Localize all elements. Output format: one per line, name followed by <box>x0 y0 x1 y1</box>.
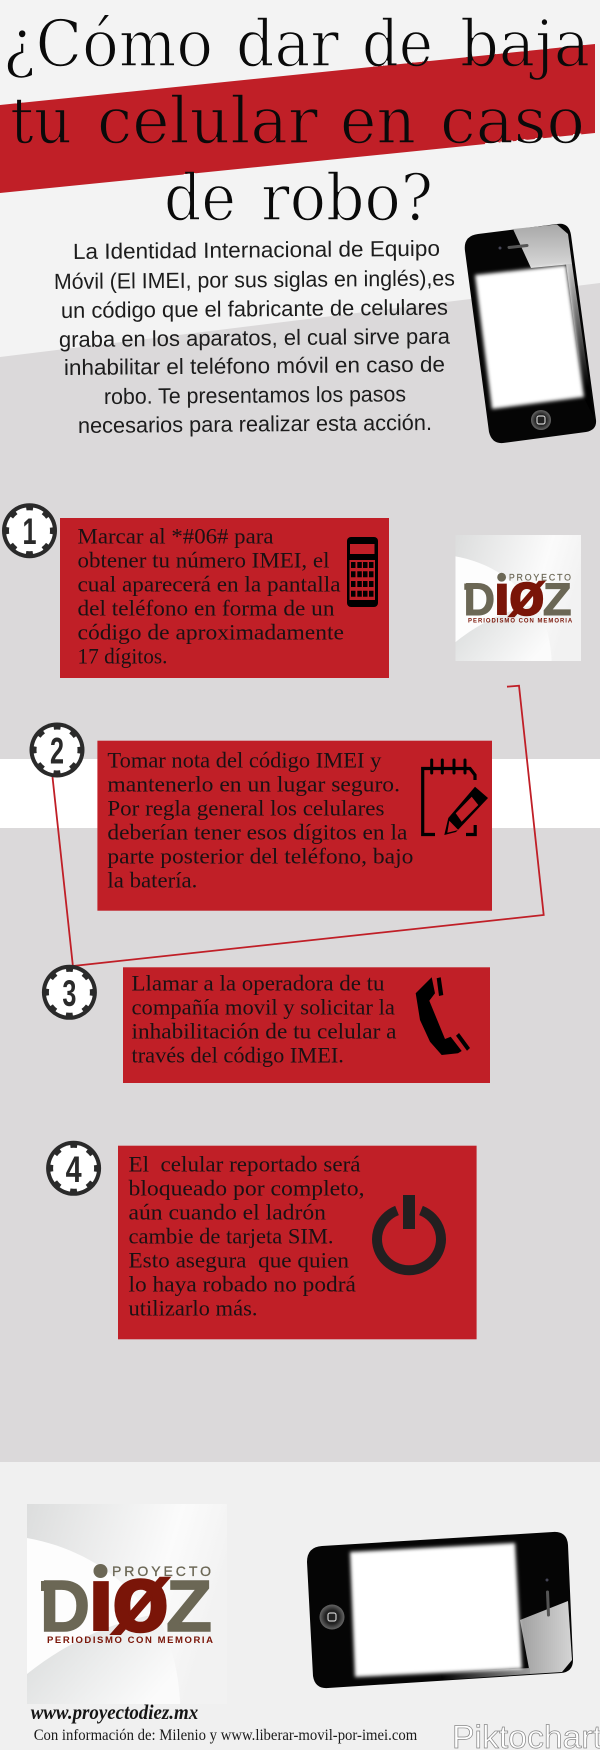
intro paragraph: inhabilitar el teléfono móvil en caso de <box>64 352 445 380</box>
step 3 text: inhabilitación de tu celular a <box>132 1019 397 1044</box>
step 1 box <box>60 518 389 678</box>
intro paragraph: robo. Te presentamos los pasos <box>104 381 406 409</box>
title <box>3 7 590 236</box>
red diagonal banner <box>0 44 595 193</box>
badge 3 <box>42 965 97 1020</box>
badge 4: 4 <box>66 1149 82 1190</box>
step 4 <box>46 1141 477 1339</box>
step 3 box <box>123 967 490 1083</box>
logo: Proyecto Diez large: Z <box>166 1567 212 1647</box>
logo: Proyecto Diez large: PERIODISMO CON MEMORIA <box>47 1635 213 1646</box>
step 1 text: 17 dígitos. <box>78 644 168 669</box>
step 3 text: Llamar a la operadora de tu <box>132 971 384 996</box>
background: footer <box>0 1462 600 1750</box>
background: grey slanted section <box>0 283 600 1462</box>
source credit: Con información de: Milenio y www.liberar-movil-por-imei.com <box>34 1727 417 1744</box>
title: en <box>340 84 416 159</box>
step 4 text: aún cuando el ladrón <box>128 1199 326 1224</box>
step 1 text: del teléfono en forma de un <box>78 596 334 621</box>
title: de <box>164 161 236 236</box>
logo: Proyecto Diez large: D <box>40 1567 90 1647</box>
background: white band <box>0 759 600 828</box>
step 2 text: la batería. <box>107 868 197 893</box>
logo: Proyecto Diez large: I <box>86 1567 116 1647</box>
step 2 text: mantenerlo en un lugar seguro. <box>107 772 400 797</box>
title: de <box>362 7 433 82</box>
title: celular <box>97 84 319 159</box>
step 3 text <box>132 971 397 1068</box>
step 1 text: código de aproximadamente <box>78 620 344 645</box>
step 4 text <box>128 1151 364 1320</box>
badge 1: 1 <box>22 511 36 552</box>
badge 1 <box>2 503 57 558</box>
badge 3: 3 <box>62 973 76 1014</box>
logo: Proyecto Diez large <box>27 1504 227 1704</box>
step 2 box <box>97 741 492 911</box>
title: baja <box>460 7 590 82</box>
icon: calculator <box>347 537 378 607</box>
connector line <box>52 686 544 966</box>
badge 4 <box>46 1141 101 1196</box>
intro paragraph: Móvil (El IMEI, por sus siglas en inglés),es <box>54 266 455 294</box>
title: tu <box>10 84 72 159</box>
logo: Proyecto Diez small: ø <box>509 560 545 628</box>
step 2 text: Por regla general los celulares <box>107 796 384 821</box>
intro paragraph: necesarios para realizar esta acción. <box>78 410 432 438</box>
logo: Proyecto Diez small: Z <box>543 574 572 625</box>
icon: notepad and pencil <box>423 760 488 835</box>
step 4 text: Esto asegura que quien <box>128 1247 349 1272</box>
website link: www.proyectodiez.mx <box>31 1700 198 1724</box>
icon: smartphone upright <box>465 224 596 443</box>
intro paragraph: La Identidad Internacional de Equipo <box>73 236 440 264</box>
step 2 text <box>107 747 413 893</box>
title: dar <box>236 7 340 82</box>
title: ¿Cómo <box>3 7 213 82</box>
badge 2: 2 <box>50 730 64 772</box>
badge 2 <box>30 722 84 778</box>
step 3 text: compañía movil y solicitar la <box>132 995 395 1020</box>
logo: Proyecto Diez small: I <box>493 574 511 625</box>
step 1 text: Marcar al *#06# para <box>78 524 274 548</box>
step 4 text: El celular reportado será <box>128 1151 361 1176</box>
logo: Proyecto Diez small <box>456 535 581 661</box>
step 4 box <box>118 1146 477 1339</box>
logo: Proyecto Diez large: ø <box>112 1545 169 1652</box>
step 4 text: cambie de tarjeta SIM. <box>128 1223 334 1248</box>
title: caso <box>440 84 585 159</box>
step 1 text <box>78 524 344 669</box>
step 4 text: bloqueado por completo, <box>128 1175 364 1200</box>
title: robo? <box>261 161 433 236</box>
intro paragraph: un código que el fabricante de celulares <box>61 295 448 323</box>
step 2 text: deberían tener esos dígitos en la <box>107 820 408 845</box>
step 2 text: parte posterior del teléfono, bajo <box>107 844 413 869</box>
logo: Proyecto Diez small: PROYECTO <box>509 572 571 582</box>
step 3 <box>42 965 490 1083</box>
step 1 <box>2 503 389 678</box>
icon: telephone handset <box>416 977 470 1055</box>
intro paragraph: graba en los aparatos, el cual sirve para <box>59 324 451 352</box>
step 2 <box>30 722 492 911</box>
step 2 text: Tomar nota del código IMEI y <box>107 747 381 772</box>
logo: Proyecto Diez large: PROYECTO <box>112 1563 211 1579</box>
icon: smartphone landscape <box>307 1532 573 1688</box>
step 3 text: través del código IMEI. <box>132 1043 344 1068</box>
step 1 text: obtener tu número IMEI, el <box>78 548 330 573</box>
step 1 text: cual aparecerá en la pantalla <box>78 572 341 597</box>
logo: Proyecto Diez small: D <box>464 574 495 625</box>
icon: power symbol <box>377 1195 441 1270</box>
step 4 text: utilizarlo más. <box>128 1295 258 1320</box>
logo: Proyecto Diez small: PERIODISMO CON MEMORIA <box>468 619 573 625</box>
step 4 text: lo haya robado no podrá <box>128 1271 356 1296</box>
intro paragraph <box>54 236 455 438</box>
